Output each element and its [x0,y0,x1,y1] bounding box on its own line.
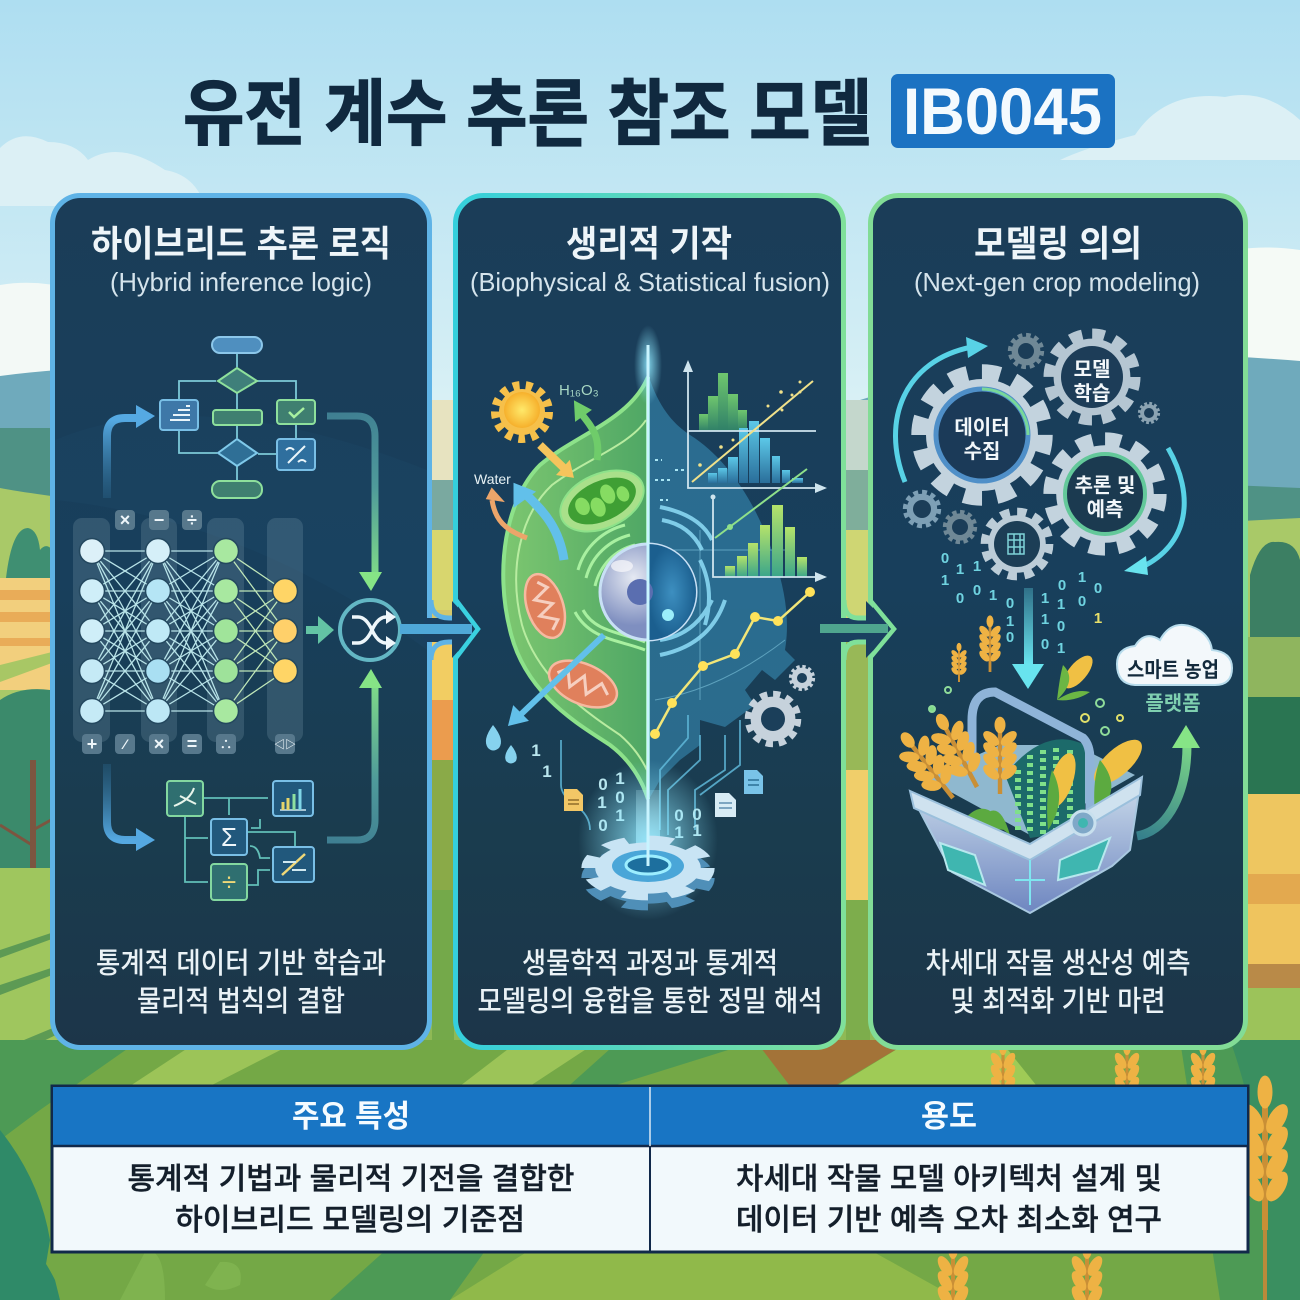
leaf cell: biological half [503,377,653,799]
text: panel 2 description: 생물학적 과정과 통계적 [522,940,778,982]
gear: model training: 학습 [1074,377,1110,406]
binary digits: 0 [615,788,625,807]
icon: merge shuffle node [340,600,400,660]
statistics flow diagram [167,781,314,900]
binary data stream: 0 [956,590,964,607]
binary data stream: 1 [1078,569,1086,586]
binary data stream: 0 [973,582,981,599]
heading: panel 1: 하이브리드 추론 로직 [91,215,391,267]
neural network: × [120,510,130,530]
title: 유전 계수 추론 참조 모델 [183,55,872,160]
binary data stream: 0 [1057,618,1065,635]
neural network: ∴ [219,737,233,752]
digital half of cell [649,377,795,799]
binary data stream: 1 [1057,596,1065,613]
gear: code icon [986,513,1048,575]
binary digits: 1 [542,762,552,781]
cloud: smart farming platform: 플랫폼 [1145,687,1201,716]
icon: sun [496,386,548,438]
neural network: ◁▷ [274,738,296,751]
neural network: × [154,734,164,754]
neural network [73,510,303,754]
heading: panel 3: 모델링 의의 [974,215,1142,267]
arrow: network to statistics [107,764,155,851]
badge: IB0045: IB0045 [903,74,1102,148]
basket with crops [886,692,1149,913]
binary data stream: 1 [1094,610,1102,627]
binary data stream: 0 [1094,580,1102,597]
binary data stream: 0 [1078,593,1086,610]
cloud: smart farming platform: 스마트 농업 [1127,654,1219,684]
arrow: network to flowchart [107,405,155,498]
statistics flow diagram: Σ [221,822,237,852]
mitochondrion lower [542,651,624,717]
binary digits [531,741,702,842]
gear: inference and prediction: 예측 [1087,493,1123,522]
charts [683,360,827,582]
icon: gears [749,667,813,743]
gear: data collection: 데이터 [954,411,1010,440]
table cell: key characteristics: 하이브리드 모델링의 기준점 [175,1195,525,1239]
icon: loose corn [1057,651,1098,700]
binary data stream: 1 [941,572,949,589]
binary digits: 0 [692,805,702,824]
arrow: network to merge [306,616,334,644]
binary digits: 1 [674,823,684,842]
neural network: = [187,734,197,754]
binary data stream: 1 [1041,590,1049,607]
binary data stream: 1 [956,561,964,578]
table: characteristics and usage [52,1086,1248,1252]
icon: water drops [486,725,517,764]
label: H16O3: H₁₆O₃ [559,382,599,399]
text: panel 3 description: 차세대 작물 생산성 예측 [926,940,1190,982]
circuit traces [561,715,740,835]
mitochondrion upper [518,569,572,643]
binary data stream: 1 [1006,613,1014,630]
subheading: panel 2: (Biophysical & Statistical fusion) [470,267,830,297]
table header: usage: 용도 [921,1091,977,1136]
table cell: usage: 데이터 기반 예측 오차 최소화 연구 [736,1195,1162,1239]
gear: model training: 모델 [1074,353,1110,382]
text: panel 2 description [478,940,822,1020]
binary data stream: 0 [1058,577,1066,594]
table cell: key characteristics [128,1154,574,1239]
table cell: usage: 차세대 작물 모델 아키텍처 설계 및 [736,1154,1162,1198]
cloud: smart farming platform [1117,625,1232,716]
neural network: + [87,734,97,754]
statistics flow diagram: ÷ [222,867,236,897]
binary digits: 0 [674,806,684,825]
label: Water: Water [474,471,511,487]
organelle membranes [575,525,645,650]
neural network: ÷ [187,510,197,530]
text: panel 1 description: 통계적 데이터 기반 학습과 [96,940,386,982]
binary digits: 1 [597,793,607,812]
icon: loose wheat [950,615,1003,682]
binary digits: 1 [615,769,625,788]
binary data stream: 1 [1041,611,1049,628]
arrow: flowchart to merge [327,416,382,591]
panel: modeling significance [870,196,1246,1048]
gear: model training [1051,336,1133,418]
connector: panel 1 to panel 2 [400,600,478,660]
arrow: statistics to merge [327,669,382,840]
arrow: cycle right [1124,448,1184,575]
text: panel 1 description [96,940,386,1020]
binary data stream: 0 [1006,595,1014,612]
line chart [650,587,815,739]
connector: panel 2 to panel 3 [820,600,894,660]
binary digits: 0 [598,775,608,794]
table cell: usage [736,1154,1162,1239]
binary data stream: 0 [1006,629,1014,646]
binary digits: 1 [531,741,541,760]
glow beam and base gear [578,325,718,920]
binary digits: 0 [598,816,608,835]
text: panel 1 description: 물리적 법칙의 결합 [137,978,345,1020]
text: panel 3 description [926,940,1190,1020]
data particles [929,687,1123,735]
neural network: ⁄ [121,736,129,752]
panel: hybrid inference logic [52,196,430,1048]
flowchart [160,337,315,498]
heading: panel 2: 생리적 기작 [566,215,732,267]
gear: inference and prediction: 추론 및 [1075,469,1135,498]
arrows: gas and water exchange [488,402,604,724]
binary data stream: 0 [1041,636,1049,653]
binary data stream [941,550,1102,657]
subheading: panel 1: (Hybrid inference logic) [110,267,372,297]
neural network: − [154,510,164,530]
table cell: key characteristics: 통계적 기법과 물리적 기전을 결합한 [128,1154,574,1198]
arrow: cycle top-left [895,337,988,482]
small gears [906,336,1158,542]
gear: inference and prediction [1053,442,1157,546]
arrow: data down to basket [1012,588,1044,689]
icon: documents [564,770,763,817]
gear: data collection [922,375,1042,495]
binary digits: 1 [692,821,702,840]
arrow: basket to cloud [1137,725,1200,836]
text: panel 2 description: 모델링의 융합을 통한 정밀 해석 [478,978,822,1020]
table header: key characteristics: 주요 특성 [292,1091,410,1136]
gear: data collection: 수집 [964,435,1000,464]
binary data stream: 0 [941,550,949,567]
binary data stream: 1 [989,587,997,604]
binary digits: 1 [615,806,625,825]
panel: physiological mechanism [456,196,844,1048]
text: panel 3 description: 및 최적화 기반 마련 [950,978,1166,1020]
subheading: panel 3: (Next-gen crop modeling) [914,267,1200,297]
nucleus [600,544,696,640]
binary data stream: 1 [973,558,981,575]
binary data stream: 1 [1057,640,1065,657]
chloroplast [551,458,653,544]
